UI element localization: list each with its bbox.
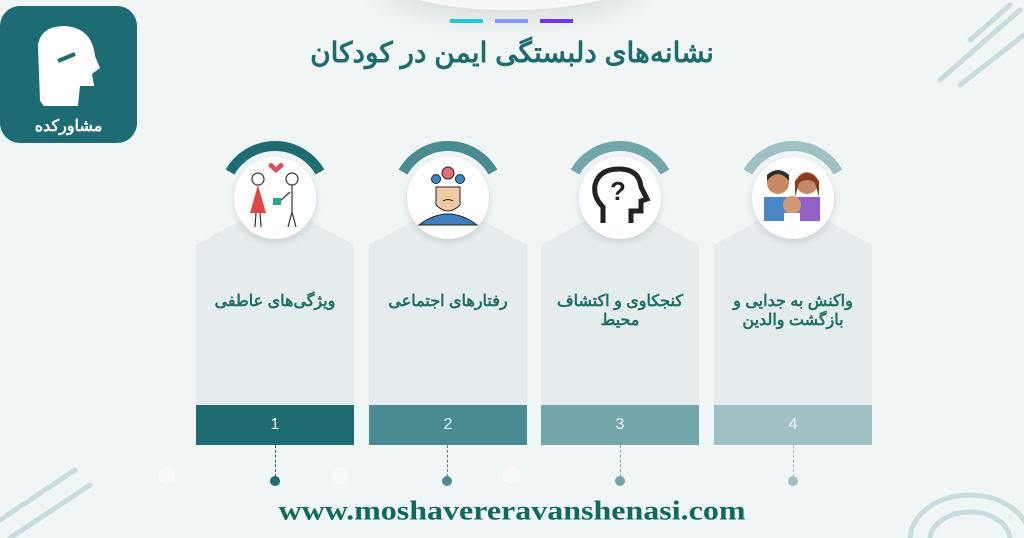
panel 4: واکنش به جدایی و بازگشت والدین [733, 293, 853, 329]
panel 2: 2 [444, 416, 452, 433]
decoration: bottom-right [908, 492, 1024, 538]
accent bars [450, 19, 573, 23]
icon: head with question mark: ? [610, 176, 626, 206]
panel 3: کنجکاوی و اکتشاف محیط [557, 293, 683, 329]
panel 2: رفتارهای اجتماعی [388, 293, 508, 310]
logo [0, 6, 137, 143]
icon: couple with gift [234, 157, 316, 239]
panel 4 [714, 221, 872, 445]
panel 1 [196, 221, 354, 445]
panel 3: 3 [616, 416, 624, 433]
logo: مشاورکده [35, 118, 102, 135]
title: نشانه‌های دلبستگی ایمن در کودکان [310, 37, 714, 68]
icon: family [752, 157, 834, 239]
icon: person with people thoughts [407, 157, 489, 239]
decorative top shadow [380, 0, 640, 10]
connectors [275, 445, 276, 477]
panel 3 [541, 221, 699, 445]
decoration: leaves top-right [938, 2, 1024, 88]
panel 1: ویژگی‌های عاطفی [215, 293, 335, 310]
panel 1: 1 [271, 416, 279, 433]
icon: head with question mark [579, 157, 661, 239]
website url: www.moshavereravanshenasi.com [279, 495, 745, 525]
panel 4: 4 [789, 416, 797, 433]
decoration: leaves bottom-left [0, 468, 92, 538]
panel 2 [369, 221, 527, 445]
arcs [226, 141, 842, 174]
